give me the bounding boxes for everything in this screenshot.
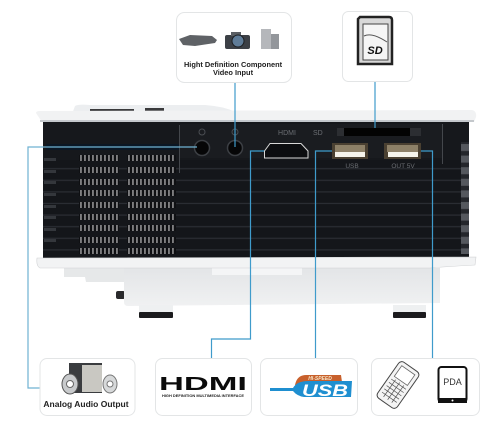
line: video input	[234, 82, 236, 147]
projector lower left section	[64, 268, 124, 282]
panel: HDMI	[156, 358, 252, 416]
line: USB	[316, 151, 332, 358]
SD card slot	[337, 128, 421, 136]
left vent grilles	[79, 155, 176, 254]
left edge marks	[44, 158, 56, 242]
panel: USB	[260, 358, 358, 416]
line: SD	[374, 81, 376, 128]
projector	[36, 105, 476, 318]
panel: analog audio output	[40, 358, 135, 416]
OUT port label: OUT 5V	[391, 163, 415, 170]
panel: video input	[176, 12, 292, 82]
line: audio	[28, 147, 197, 388]
rear knob	[116, 291, 125, 299]
panel: mobile and PDA	[372, 358, 480, 416]
right foot	[393, 305, 426, 318]
panel: SD card	[342, 12, 412, 82]
SD port label: SD	[313, 130, 323, 137]
USB port label: USB	[345, 163, 359, 170]
panel text: Hight Definition Component	[184, 60, 283, 69]
USB logo	[270, 375, 352, 400]
USB logo: USB	[302, 381, 348, 400]
left foot	[139, 305, 173, 318]
connector lines	[28, 81, 432, 388]
icon: speakers	[62, 363, 117, 394]
panel text: Analog Audio Output	[43, 399, 129, 409]
line: out 5V	[421, 151, 432, 358]
icon: PDA tablet: PDA	[443, 377, 462, 387]
HDMI port	[264, 144, 308, 158]
USB port	[332, 143, 368, 159]
AV jack	[228, 129, 242, 156]
audio jack	[194, 129, 210, 156]
USB logo: HI-SPEED	[308, 376, 332, 382]
projector top hump	[72, 105, 236, 114]
HDMI tagline: HIGH DEFINITION MULTIMEDIA INTERFACE	[162, 394, 245, 398]
projector top band	[36, 110, 476, 122]
projector top display slot	[90, 109, 134, 113]
icon: camera	[225, 32, 250, 49]
icon: DVD player	[179, 35, 217, 46]
projector lower body	[124, 268, 440, 306]
HDMI logo: HDMI	[159, 374, 247, 394]
icon: SD card: SD	[367, 45, 383, 57]
panel: video input: Video Input	[213, 68, 254, 77]
projector bottom lip	[37, 257, 476, 268]
OUT port	[384, 143, 421, 159]
icon: game console	[261, 29, 279, 49]
HDMI port label: HDMI	[278, 130, 296, 137]
icon: phone	[376, 360, 420, 410]
projector rear panel	[43, 122, 469, 258]
line: HDMI	[212, 151, 265, 358]
